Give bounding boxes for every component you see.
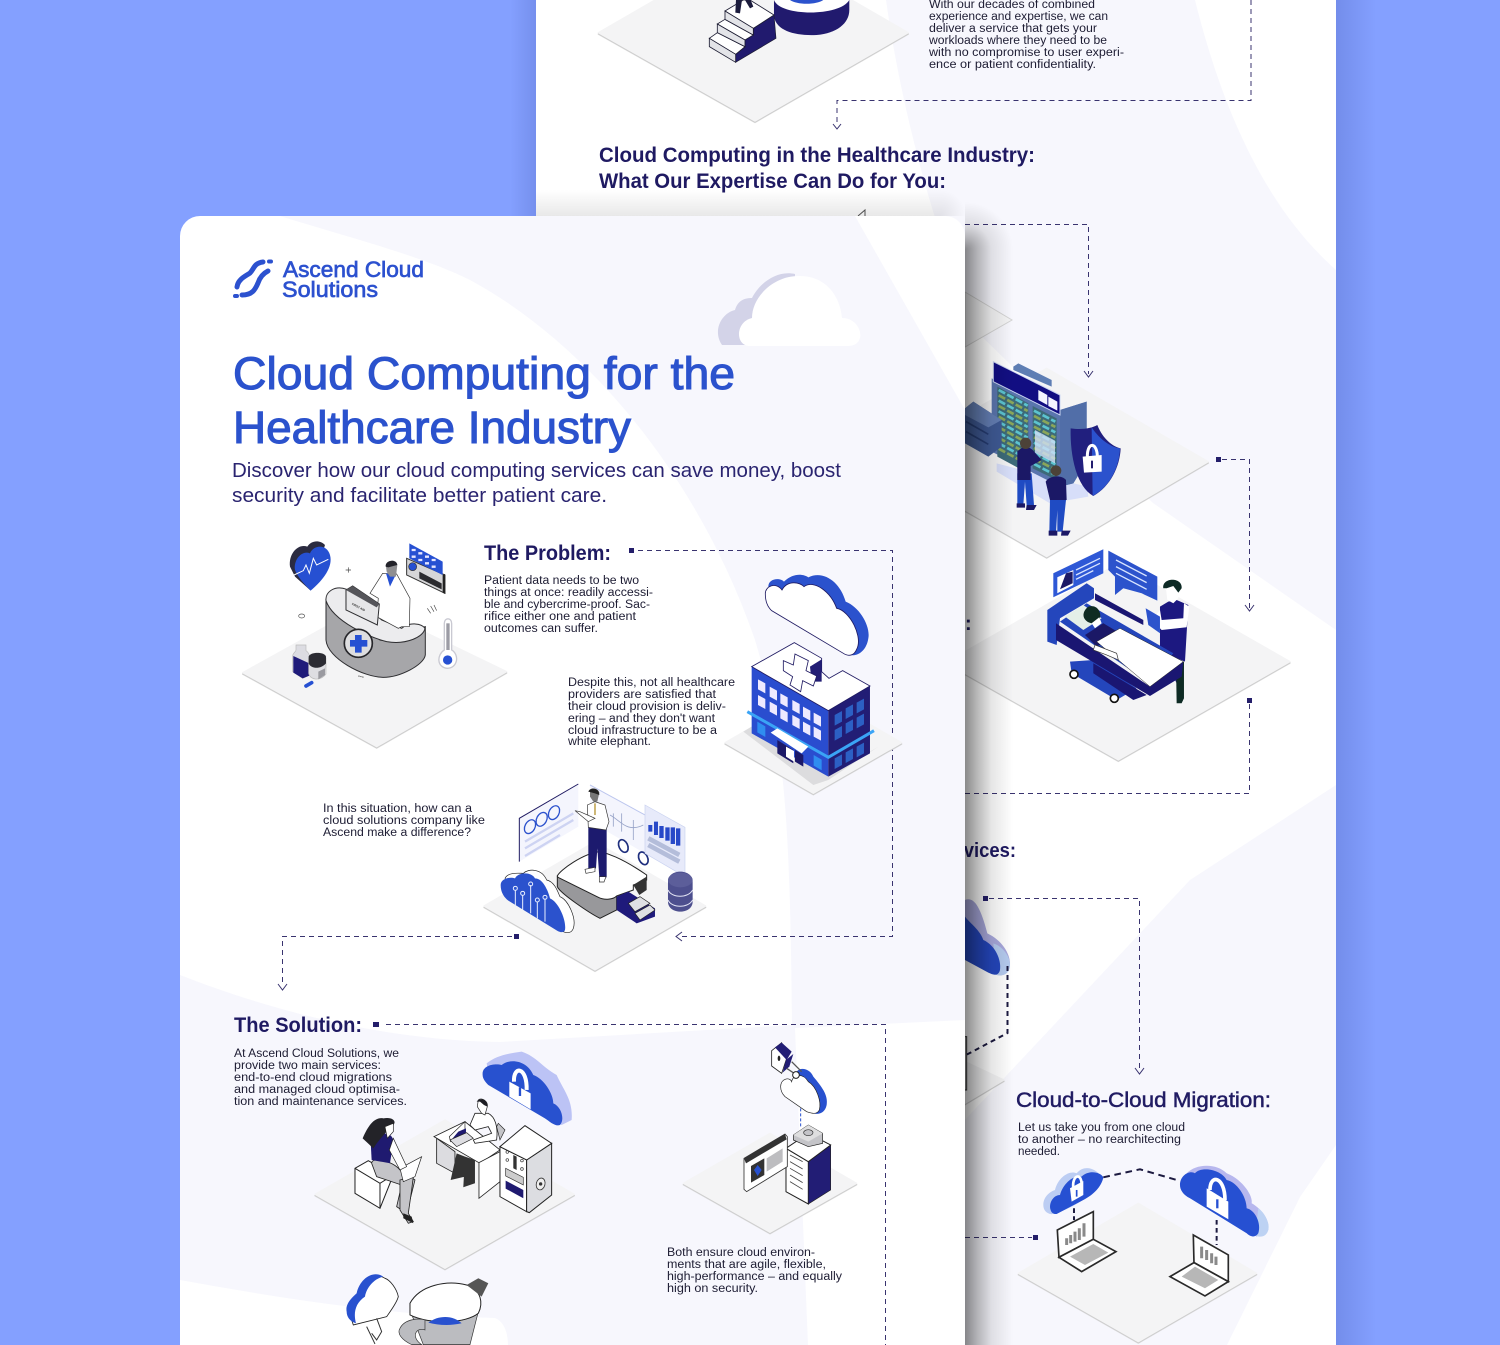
illustration: cloud-to-cloud migration [1018, 1166, 1269, 1342]
text block: problem body: things at once: readily accessi- [484, 587, 653, 599]
text block: problem body: rifice either one and patient [484, 611, 637, 623]
arrow: connector problem [629, 548, 892, 941]
heading: The Problem: The Problem: [484, 542, 611, 565]
illustration: analyst on pedestal [484, 784, 706, 970]
illustration: migration team [315, 1052, 574, 1345]
icon: server tower [500, 1126, 552, 1213]
illustration: small pointer fragment [858, 210, 865, 216]
text block: solution body: tion and maintenance services. [234, 1096, 407, 1108]
icon: dashboard panels [519, 784, 685, 877]
text block: both ensure: high on security. [667, 1283, 758, 1295]
icon: laptop left [1057, 1212, 1116, 1272]
icon: wall panel [407, 543, 445, 594]
arrow: connector to migration [983, 896, 1144, 1074]
icon: heart monitor [290, 541, 331, 591]
arrow: connector to server illustration [965, 224, 1093, 377]
illustration: hidden platform corner [965, 292, 1012, 347]
icon: cloud [765, 575, 869, 655]
illustration: secure servers [965, 362, 1208, 557]
text block: despite this: cloud infrastructure to be a [568, 725, 718, 737]
text block: solution body: At Ascend Cloud Solutions, we [234, 1048, 399, 1060]
text block: despite this: their cloud provision is deliv- [568, 701, 726, 713]
icon: thermometer [439, 619, 457, 668]
icon: circuit cloud [501, 870, 574, 933]
text block: despite this: ering – and they don't want [568, 713, 716, 725]
text block: back page intro: workloads where they need to be [928, 35, 1107, 47]
text block: problem body: Patient data needs to be two [484, 575, 639, 587]
text block: both ensure [667, 1247, 842, 1295]
text block: back page intro [928, 0, 1124, 71]
icon: doctor [370, 561, 410, 628]
arrow: connector from bed to services [965, 698, 1252, 794]
heading: The Solution: The Solution: [234, 1014, 362, 1037]
icon: cloud [781, 1069, 827, 1114]
text block: solution body: provide two main services: [234, 1060, 381, 1072]
text block: back page intro: with no compromise to user experi- [928, 47, 1124, 59]
icon: desk and man [434, 1099, 505, 1198]
text block: solution body: end-to-end cloud migrations [234, 1072, 392, 1084]
icon: cloud lock [483, 1052, 572, 1125]
text block: both ensure: ments that are agile, flexible, [667, 1259, 826, 1271]
text block: migration body [1018, 1122, 1185, 1158]
text block: back page intro: deliver a service that gets your [929, 23, 1097, 35]
icon: woman with laptop [355, 1118, 422, 1223]
heading: expertise: Cloud Computing in the Healthcare Industry: [599, 144, 1035, 167]
logo: Ascend Cloud Solutions [235, 257, 424, 302]
icon: browser window [744, 1134, 787, 1192]
text block: question [323, 803, 485, 839]
illustration: doctor at reception [243, 541, 507, 747]
arrow: connector into migration illustration [965, 1235, 1038, 1240]
text block: migration body: Let us take you from one cloud [1018, 1122, 1185, 1134]
text block: both ensure: Both ensure cloud environ- [667, 1247, 815, 1259]
heading: expertise [599, 144, 1035, 193]
icon: hospital building [747, 643, 874, 777]
icon: funnel cloud [346, 1274, 488, 1345]
text block: solution body [234, 1048, 407, 1108]
title: Healthcare Industry [233, 402, 631, 453]
text block: back page intro: experience and expertise, we can [929, 11, 1108, 23]
logo: Ascend Cloud Solutions: Solutions [282, 277, 378, 302]
text block: both ensure: high-performance – and equally [667, 1271, 842, 1283]
text block: back page intro: ence or patient confidentiality. [929, 59, 1096, 71]
text: clipped heading colon: : [965, 613, 972, 635]
icon: medicine bottles [293, 645, 326, 686]
icon: laptop right [1170, 1235, 1228, 1296]
icon: analyst [575, 788, 609, 882]
illustration: server and cloud security [683, 1043, 857, 1232]
heading: expertise: What Our Expertise Can Do for You: [599, 170, 946, 193]
heading: services: Services: [934, 840, 1016, 862]
arrow: connector solution [373, 1022, 886, 1345]
logo: Ascend Cloud Solutions: Ascend Cloud [283, 257, 424, 282]
icon: server [786, 1125, 831, 1204]
text block: migration body: needed. [1018, 1146, 1060, 1158]
illustration: hospital and cloud [725, 575, 902, 793]
subtitle [232, 459, 841, 507]
arrow: connector to solution [278, 934, 519, 990]
icon: database [668, 872, 693, 912]
illustration: patient and doctor [965, 549, 1290, 760]
icon: reception desk [326, 588, 425, 677]
icon: small cloud lock [1043, 1168, 1103, 1214]
panel: back page [536, 0, 1336, 1345]
icon: decorative clouds [718, 273, 860, 346]
text block: question: In this situation, how can a [323, 803, 473, 815]
icon: first aid box [346, 586, 379, 625]
text block: question: Ascend make a difference? [323, 827, 471, 839]
text block: problem body: ble and cybercrime-proof. Sac- [484, 599, 650, 611]
text block: solution body: and managed cloud optimisa- [234, 1084, 400, 1096]
illustration: clipped cloud [965, 899, 1010, 1103]
heading: migration: Cloud-to-Cloud Migration: [1016, 1088, 1271, 1112]
icon: pedestal and stairs [557, 852, 655, 923]
subtitle: Discover how our cloud computing services can save money, boost [232, 459, 841, 482]
panel: front page [180, 216, 965, 1345]
text block: problem body: outcomes can suffer. [484, 623, 598, 635]
text block: despite this: white elephant. [567, 736, 651, 748]
icon: logo mark [235, 262, 271, 296]
title [233, 348, 735, 453]
subtitle: security and facilitate better patient care. [232, 484, 607, 507]
arrow: connector to expertise heading [833, 0, 1251, 129]
title: Cloud Computing for the [233, 348, 735, 399]
text block: despite this: providers are satisfied that [568, 689, 717, 701]
arrow: thick dashed cloud link [966, 966, 1008, 1055]
text block: despite this [567, 677, 735, 748]
text block: question: cloud solutions company like [323, 815, 485, 827]
text block: migration body: to another – no rearchitecting [1018, 1134, 1181, 1146]
icon: large cloud lock [1180, 1166, 1269, 1237]
arrow: connector to bed illustration [1216, 457, 1254, 611]
text block: problem body [484, 575, 653, 635]
text block: despite this: Despite this, not all healthcare [568, 677, 735, 689]
icon: padlock [772, 1043, 802, 1078]
icon: first aid box: FIRST AID [351, 602, 367, 613]
illustration: stairs platform top [598, 0, 908, 121]
